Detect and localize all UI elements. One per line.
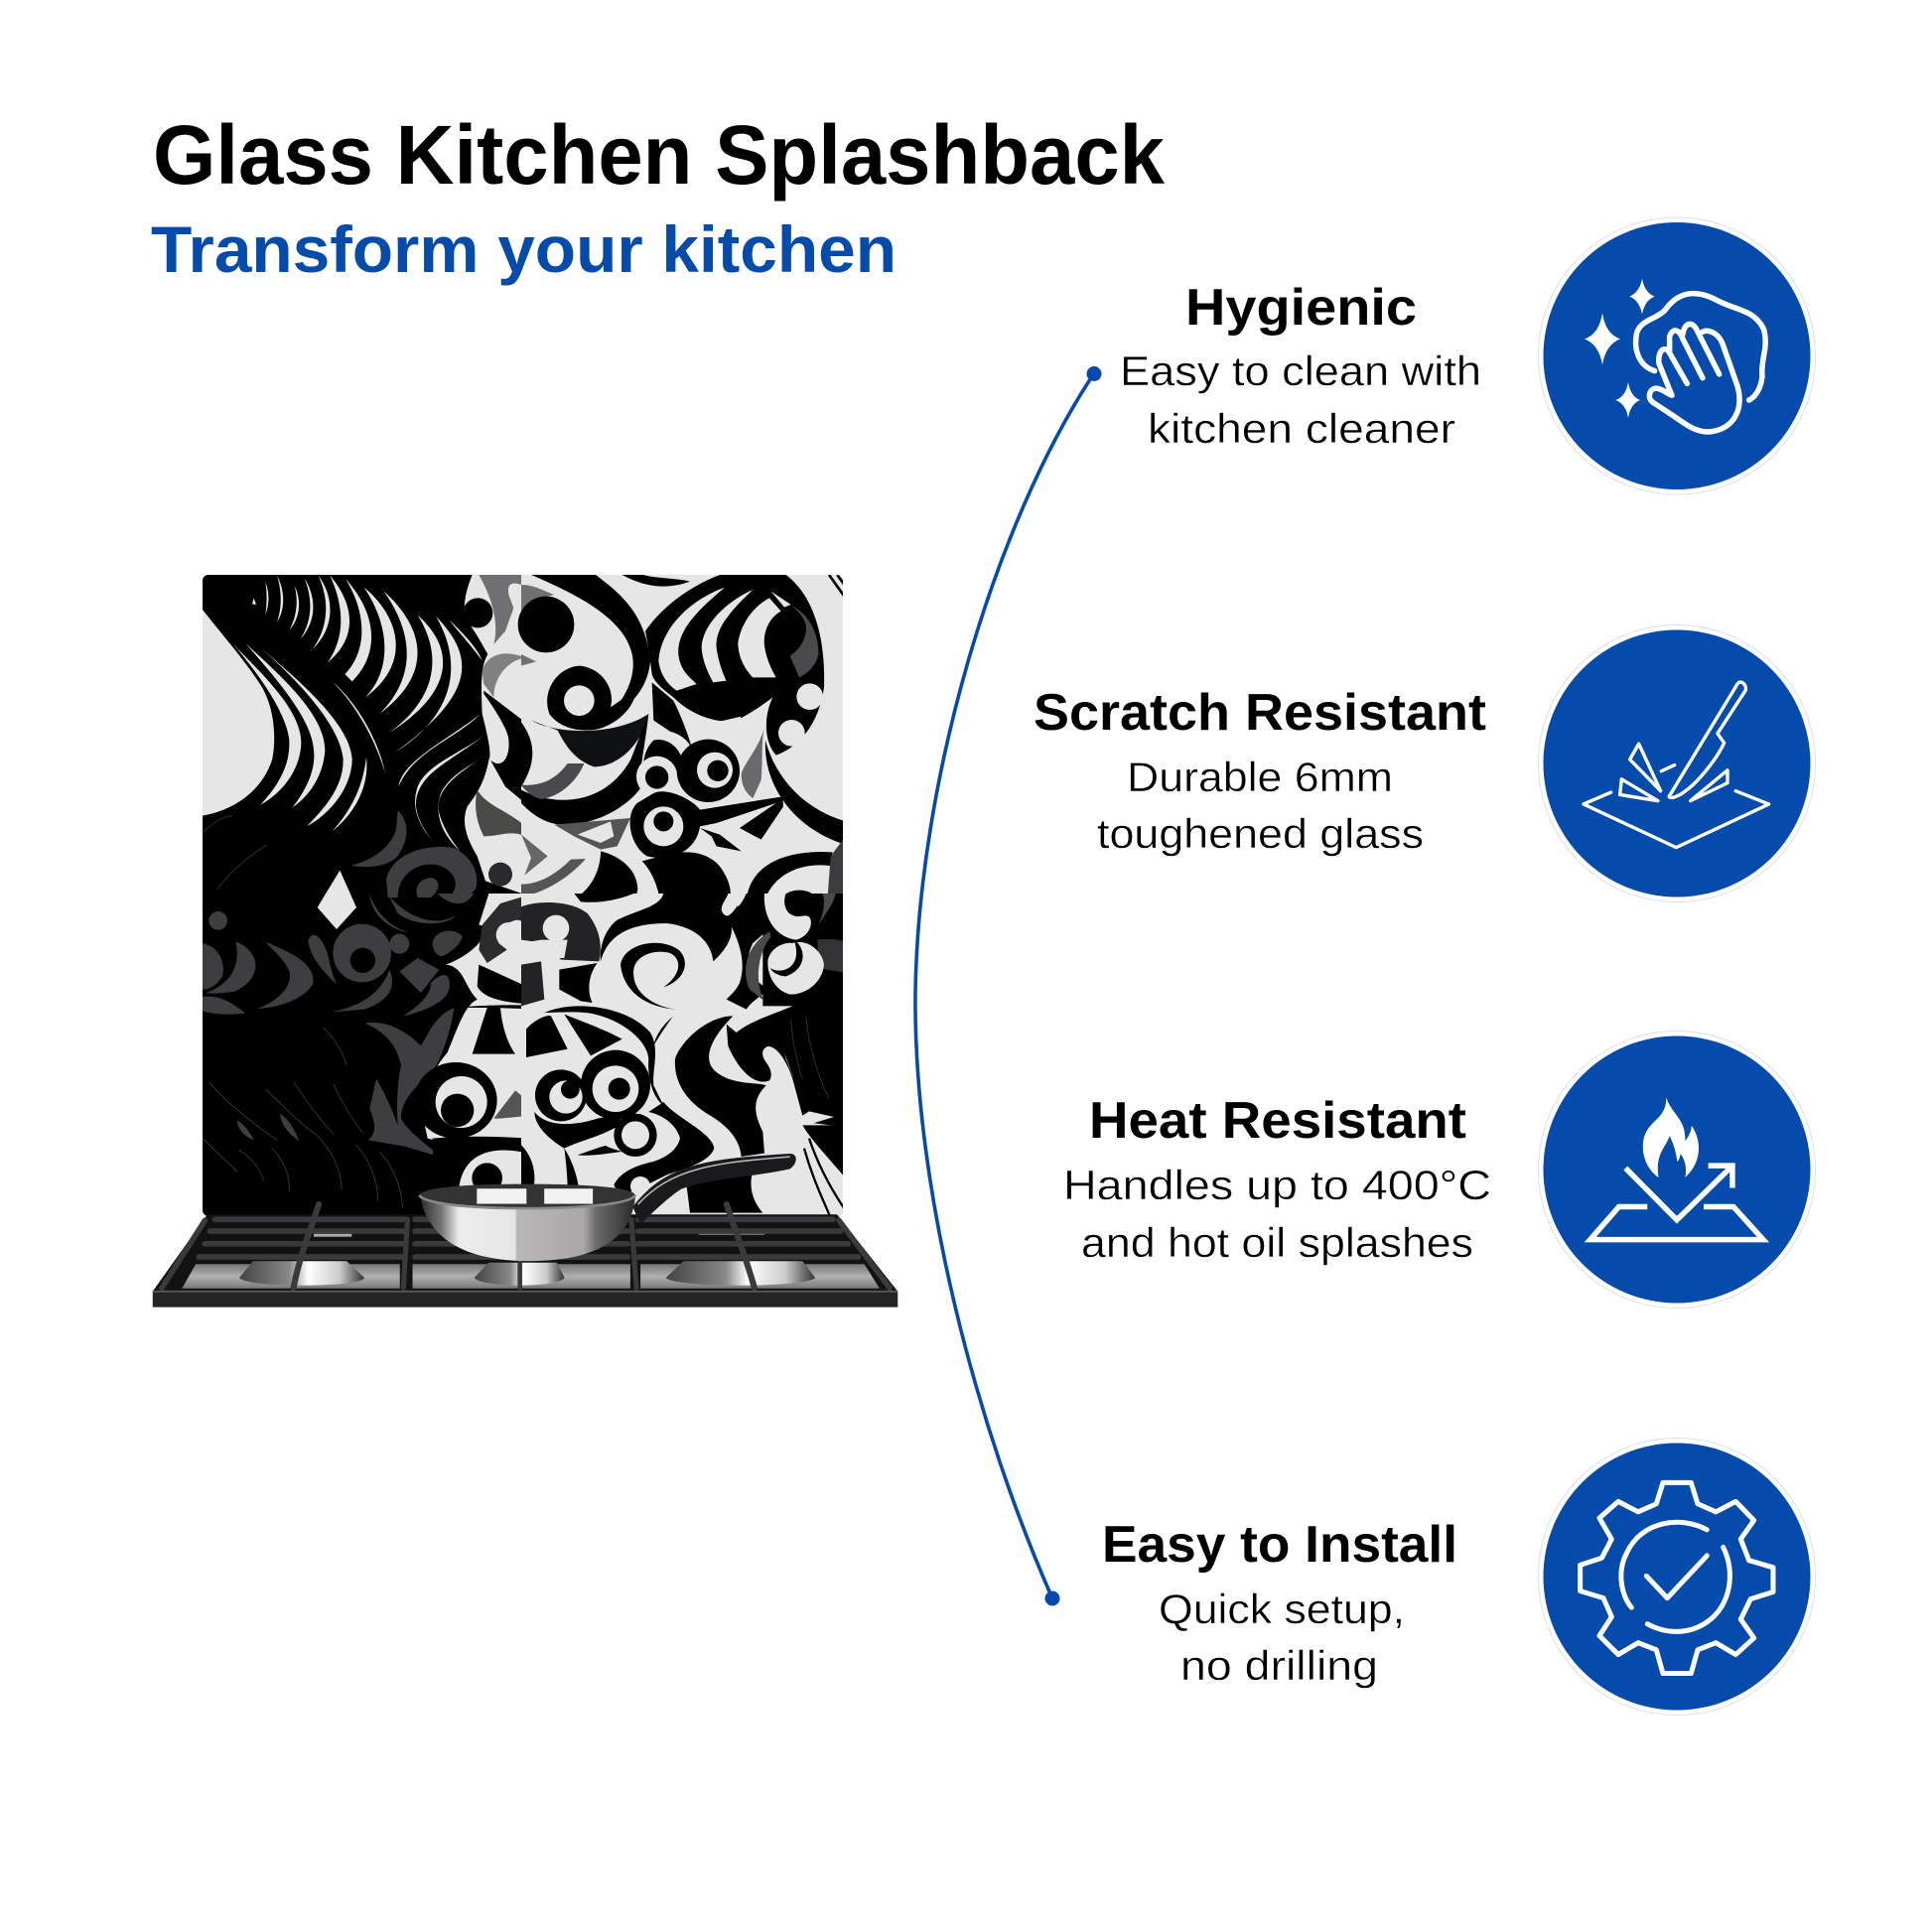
- right black region: [727, 1006, 843, 1126]
- hob body: [153, 1204, 897, 1308]
- metal panes: [182, 1264, 400, 1289]
- paired swirls: [581, 1050, 650, 1120]
- small swirls: [652, 682, 692, 747]
- feature: Heat Resistant: [1063, 1092, 1491, 1266]
- feature: Heat Resistant: Heat Resistant: [1089, 1092, 1466, 1150]
- pattern: lower-right swirls: [521, 894, 847, 1231]
- arc cluster: [645, 575, 824, 756]
- feature: Easy to Install: Easy to Install: [1102, 1516, 1457, 1574]
- feature: Hygienic: Hygienic: [1185, 279, 1417, 337]
- icon: gear with check mark: [1539, 1438, 1815, 1716]
- feature: Easy to Install: Quick setup,: [1159, 1586, 1405, 1632]
- grate bars: [162, 1204, 890, 1288]
- right scrolls: [762, 894, 844, 1006]
- pattern: upper-right swirls: [518, 575, 846, 904]
- left shards: [521, 961, 544, 1006]
- dome arcs: [526, 1016, 568, 1057]
- icon: hand wiping with sparkles: [1539, 217, 1815, 494]
- bottom shapes: [521, 1146, 534, 1184]
- icon: knife scratching glass: [1539, 625, 1815, 901]
- subtitle: Transform your kitchen: [151, 212, 897, 286]
- feature: Scratch Resistant: Scratch Resistant: [1034, 684, 1486, 742]
- feature: Hygienic: kitchen cleaner: [1148, 405, 1455, 452]
- splashback pattern panel: [203, 575, 847, 1231]
- feature: Scratch Resistant: [1034, 684, 1486, 857]
- feature: Scratch Resistant: toughened glass: [1097, 810, 1424, 857]
- feature: Easy to Install: [1102, 1516, 1457, 1689]
- central dark shape and figure: [479, 897, 521, 963]
- feature: Heat Resistant: Handles up to 400°C: [1063, 1162, 1491, 1208]
- feature: Hygienic: [1120, 279, 1481, 452]
- feature: Hygienic: Easy to clean with: [1120, 347, 1481, 394]
- large central blob: [601, 894, 769, 1010]
- front edge: [153, 1292, 897, 1308]
- connector curve: [915, 366, 1102, 1606]
- burners: [239, 1261, 364, 1286]
- gas hob and pan: [153, 1154, 897, 1308]
- icon: flame over glass: [1539, 1031, 1815, 1309]
- spiral: [621, 943, 685, 1010]
- frying pan: [419, 1154, 796, 1261]
- title: Glass Kitchen Splashback: [153, 108, 1165, 202]
- feature: Easy to Install: no drilling: [1180, 1642, 1378, 1689]
- S band: [675, 1016, 766, 1157]
- feature: Heat Resistant: and hot oil splashes: [1081, 1219, 1473, 1266]
- feature: Scratch Resistant: Durable 6mm: [1127, 754, 1393, 800]
- pattern: top-left stripes: [203, 575, 533, 897]
- pattern: lower-left gray ornaments: [203, 871, 533, 1216]
